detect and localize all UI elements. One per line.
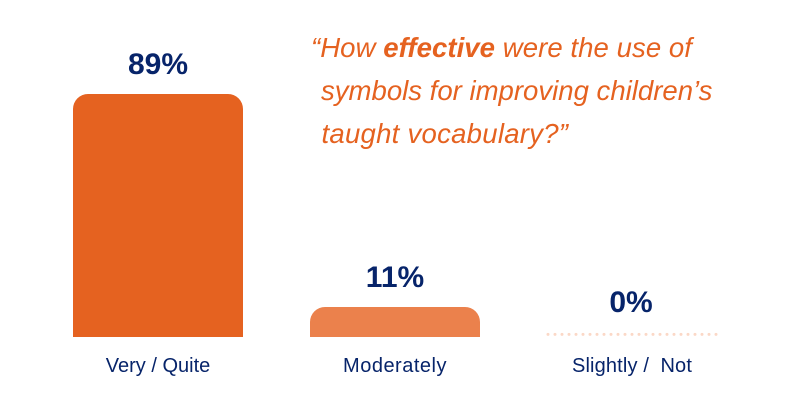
label: Slightly / Not: Slightly / Not xyxy=(572,355,692,377)
question heading xyxy=(311,32,712,149)
bar: Very / Quite xyxy=(73,94,243,336)
question heading: “How effective were the use of xyxy=(311,32,692,62)
question heading: symbols for improving children’s xyxy=(321,75,712,106)
value: 11%: 11% xyxy=(366,261,424,294)
value: 0%: 0% xyxy=(609,286,653,319)
value: 89%: 89% xyxy=(128,48,188,81)
bar: Moderately xyxy=(310,307,480,336)
label: Moderately: Moderately xyxy=(343,355,447,377)
question heading: taught vocabulary?” xyxy=(322,118,568,149)
label: Very / Quite: Very / Quite xyxy=(106,355,210,377)
bar: Slightly / Not (dotted baseline) xyxy=(546,332,718,336)
